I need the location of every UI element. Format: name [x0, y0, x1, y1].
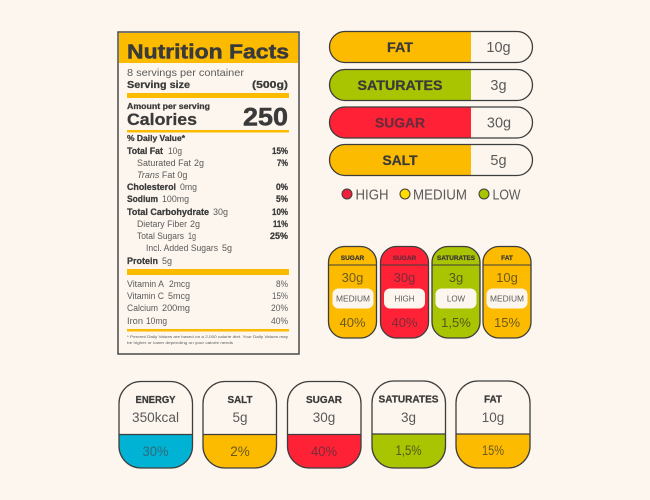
pill: salt: 5g	[490, 153, 507, 169]
small card: fat medium: 15%	[494, 315, 520, 330]
bottom card: salt	[203, 382, 276, 468]
daily values list: 10%	[272, 207, 288, 217]
small card: sugar medium	[328, 246, 376, 338]
daily values list: 5g	[162, 256, 172, 266]
bottom card: saturates: SATURATES	[378, 394, 439, 406]
bottom card: energy: 30%	[142, 444, 168, 459]
pill: saturates: 3g	[490, 78, 507, 94]
daily values list: Protein	[127, 256, 158, 266]
calories block: Amount per serving	[127, 102, 210, 111]
daily values list: Incl. Added Sugars	[146, 243, 218, 253]
daily values list: 5g	[222, 243, 232, 253]
daily values list: 0mg	[180, 182, 197, 192]
daily values list: 2g	[190, 219, 200, 229]
small card: fat medium: FAT	[501, 255, 513, 262]
bottom card: fat: 10g	[482, 410, 504, 425]
daily values list: Sodium	[127, 194, 158, 204]
vitamins list: Calcium	[127, 303, 158, 313]
panel: nutrition facts label	[118, 32, 299, 354]
small card: sugar high	[380, 246, 428, 338]
daily values list: Trans Fat 0g	[137, 170, 187, 180]
bottom card: fat: FAT	[484, 394, 502, 406]
header band	[119, 33, 298, 63]
pill: fat	[330, 32, 532, 62]
vitamins list: 8%	[276, 279, 288, 289]
small card: saturates low: LOW	[447, 294, 466, 304]
pill: sugar: 30g	[487, 116, 511, 132]
vitamins list: 20%	[271, 303, 288, 313]
pill: salt: SALT	[382, 153, 418, 168]
daily values list: Dietary Fiber	[137, 219, 187, 229]
bottom card: energy	[119, 382, 192, 468]
bottom card: salt: 2%	[230, 444, 250, 459]
daily values list: Total Carbohydrate	[127, 207, 209, 217]
daily values list: 7%	[277, 158, 288, 168]
small card: saturates low: 1,5%	[441, 315, 471, 330]
bottom card: sugar: SUGAR	[306, 395, 343, 406]
bottom card: sugar: 40%	[311, 444, 337, 459]
small card: sugar medium: 30g	[342, 270, 363, 285]
small card: sugar high: 40%	[391, 315, 418, 330]
vitamins list: 15%	[272, 291, 288, 301]
small card: saturates low: 3g	[449, 270, 463, 285]
pill: salt	[330, 144, 532, 176]
vitamins list: 2mcg	[169, 279, 190, 289]
daily values list: 2g	[194, 158, 204, 168]
small card: saturates low: SATURATES	[437, 255, 476, 262]
small card: fat medium: MEDIUM	[490, 294, 524, 304]
vitamins list: Iron	[127, 316, 143, 326]
bottom card: sugar: 30g	[313, 410, 335, 425]
calories block	[127, 102, 288, 132]
pill: sugar: SUGAR	[375, 116, 425, 130]
daily values list: Cholesterol	[127, 182, 176, 192]
bottom card: salt: SALT	[228, 395, 252, 406]
daily values list: Total Sugars	[137, 231, 184, 241]
footnote: * Percent Daily Values are based on a 2,000 calorie diet. Your Daily Values may	[127, 334, 288, 339]
daily values list: 15%	[272, 146, 288, 156]
servings text	[127, 67, 288, 91]
bottom card: saturates: 3g	[401, 410, 416, 425]
small card: sugar medium: MEDIUM	[336, 294, 370, 304]
bottom card: sugar	[288, 382, 361, 468]
daily values list	[127, 134, 288, 266]
daily values list: 100mg	[162, 194, 189, 204]
servings text: (500g)	[252, 80, 288, 91]
bottom card: fat: 15%	[482, 443, 504, 458]
pill: fat: 10g	[486, 40, 511, 56]
bottom card: saturates	[372, 381, 446, 468]
legend: HIGH	[356, 188, 388, 204]
daily values list: 25%	[270, 231, 288, 241]
small card: sugar high: 30g	[394, 270, 415, 285]
daily values list: 1g	[188, 231, 196, 241]
bottom card: fat	[456, 381, 530, 468]
daily values list: Saturated Fat	[137, 158, 191, 168]
pill: sugar	[330, 107, 532, 138]
vitamins list: 40%	[271, 316, 288, 326]
daily values list: 11%	[273, 219, 288, 229]
bottom card: saturates: 1,5%	[396, 443, 422, 458]
bottom card: energy: 350kcal	[132, 410, 179, 425]
servings text: Serving size	[127, 80, 190, 91]
vitamins list: 10mg	[146, 316, 167, 326]
small card: fat medium	[483, 246, 531, 338]
pill: fat: FAT	[387, 40, 414, 55]
vitamins list: Vitamin A	[127, 279, 164, 289]
vitamins list: 5mcg	[168, 291, 190, 301]
servings text: 8 servings per container	[127, 67, 245, 79]
calories block: Calories	[127, 110, 197, 129]
legend	[342, 188, 521, 204]
footnote: be higher or lower depending on your calorie needs	[127, 340, 233, 345]
daily values list: 0%	[276, 182, 288, 192]
calories block: 250	[243, 104, 288, 132]
small card: sugar high: HIGH	[394, 294, 415, 304]
daily values list: 10g	[168, 146, 182, 156]
legend: LOW	[492, 188, 521, 204]
vitamins list: 200mg	[162, 303, 190, 313]
pill: saturates: SATURATES	[358, 78, 442, 93]
footnote	[127, 334, 288, 345]
daily values list: Total Fat	[127, 146, 163, 156]
small card: sugar medium: SUGAR	[341, 255, 365, 262]
small card: fat medium: 10g	[496, 270, 518, 285]
pill: saturates	[330, 70, 532, 100]
vitamins list: Vitamin C	[127, 291, 164, 301]
title: Nutrition Facts	[127, 40, 289, 64]
small card: sugar medium: 40%	[339, 315, 366, 330]
daily values list: % Daily Value*	[127, 134, 186, 143]
daily values list: 30g	[213, 207, 228, 217]
vitamins list	[127, 279, 288, 326]
bottom card: energy: ENERGY	[136, 395, 176, 406]
bottom card: salt: 5g	[232, 410, 248, 425]
legend: MEDIUM	[413, 188, 467, 204]
small card: saturates low	[432, 246, 480, 338]
small card: sugar high: SUGAR	[393, 255, 417, 262]
daily values list: 5%	[276, 194, 288, 204]
